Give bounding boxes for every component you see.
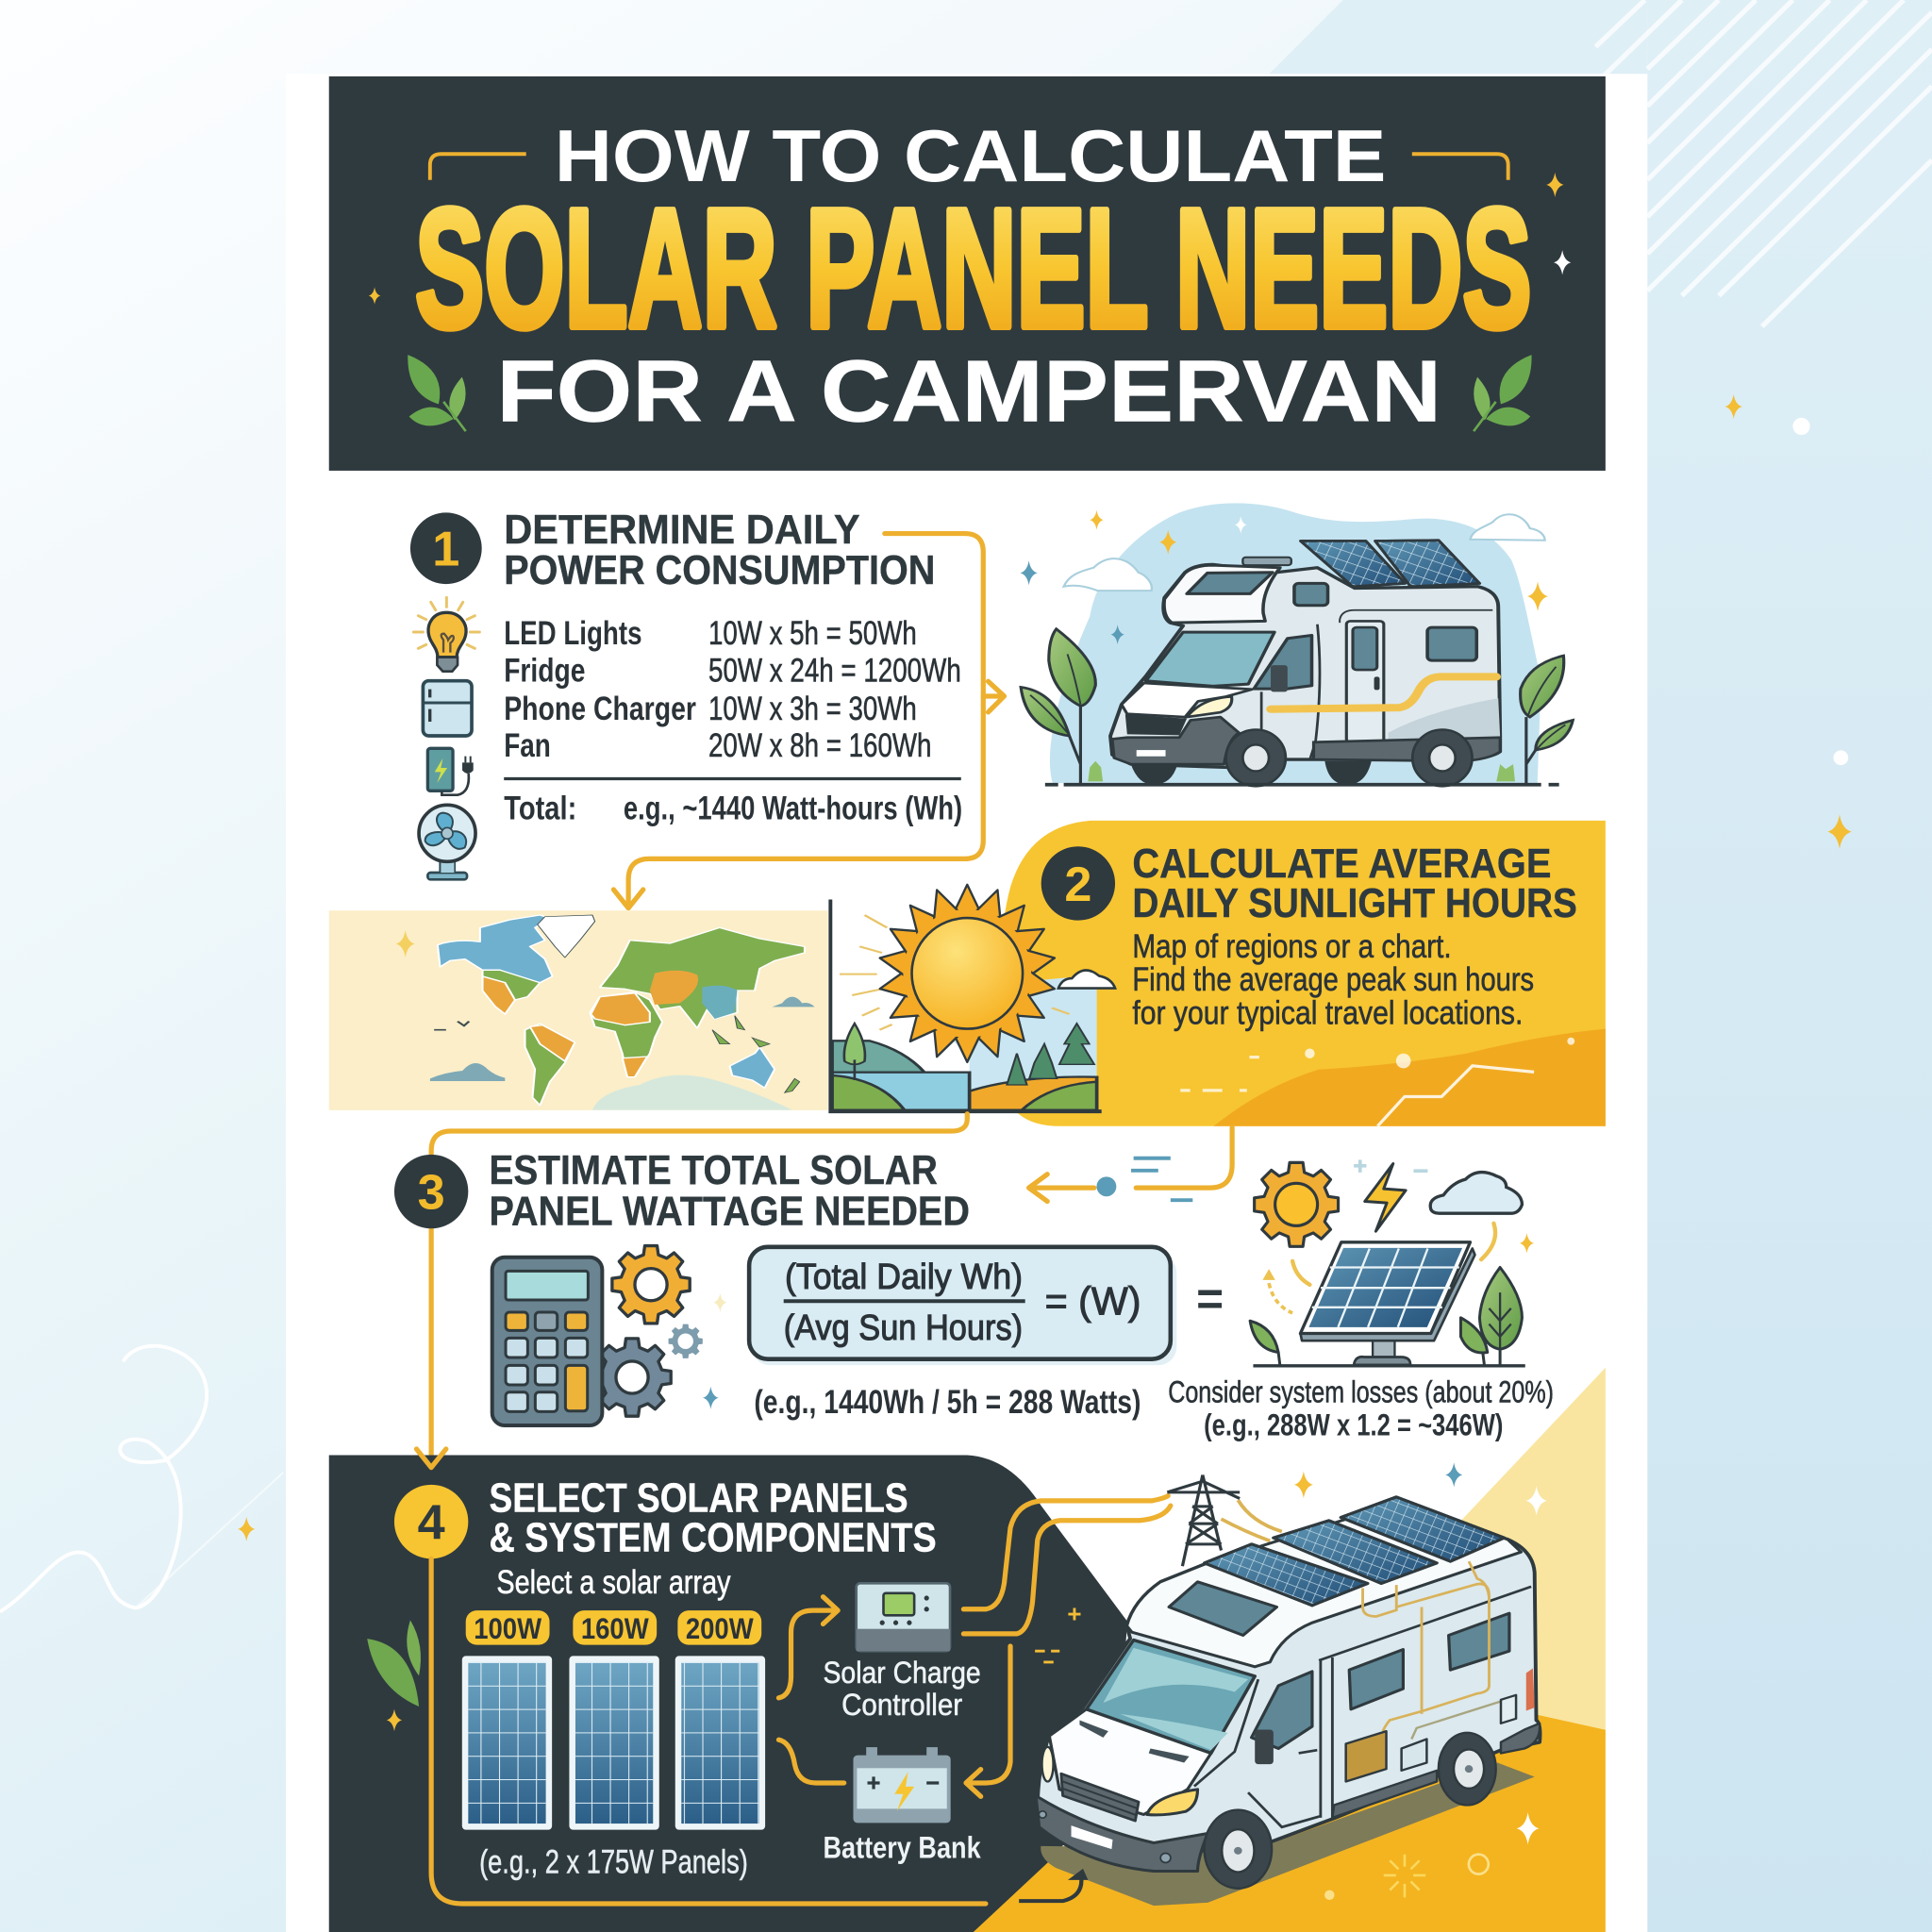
appliance icons [413, 597, 479, 879]
lower side trim [1332, 1724, 1540, 1818]
clouds [1064, 514, 1545, 591]
left leaf and sparkles [367, 1621, 421, 1731]
teal sparkle [703, 1387, 719, 1409]
icon: sun gear [1255, 1162, 1339, 1246]
step 3 heading: PANEL WATTAGE NEEDED [490, 1189, 970, 1234]
step 4 heading: & SYSTEM COMPONENTS [490, 1515, 937, 1560]
step 4 heading: SELECT SOLAR PANELS [490, 1476, 908, 1522]
array label: Select a solar array [496, 1564, 731, 1601]
overcab [1164, 565, 1280, 623]
windscreen [1087, 1640, 1255, 1753]
step 3 badge [394, 1155, 468, 1228]
hood [1122, 683, 1252, 717]
step 3 heading: ESTIMATE TOTAL SOLAR [490, 1148, 938, 1193]
dark panel [329, 1456, 1127, 1932]
plants [1250, 1268, 1522, 1365]
step 2 badge: 2 [1064, 858, 1091, 912]
section 3: estimate wattage [394, 1114, 1606, 1738]
section 4: select panels and components [329, 1449, 1606, 1932]
arrow head [1262, 1269, 1275, 1280]
roof solar panels [1301, 541, 1479, 587]
cloud near sun [1058, 971, 1115, 989]
system losses note: Consider system losses (about 20%) [1168, 1374, 1554, 1408]
pylon wires [1221, 1500, 1282, 1541]
consumption table: e.g., ~1440 Watt-hours (Wh) [624, 791, 962, 827]
door window [1252, 1672, 1312, 1748]
wipers [1079, 1720, 1190, 1762]
arrow: from yellow panel to left [1029, 1127, 1232, 1201]
icon: fridge [423, 681, 472, 736]
arrow: step 1 to camper and step 2 [613, 534, 1004, 908]
wattage badges [466, 1610, 761, 1645]
wiring [1363, 1561, 1489, 1731]
ground line [1045, 779, 1559, 790]
bumper [1112, 717, 1239, 764]
consumption table: 50W x 24h = 1200Wh [708, 652, 961, 689]
icon: light bulb [413, 597, 479, 672]
windows [1187, 573, 1476, 660]
small arrows [1292, 1224, 1495, 1285]
wheel shadows [1131, 761, 1372, 785]
map panel [329, 910, 828, 1110]
mirror [1271, 665, 1288, 691]
illustration: motorhome with roof panels [1021, 503, 1573, 786]
van body [1038, 1503, 1541, 1865]
yellow stripe [1271, 676, 1496, 709]
step 4 heading [490, 1476, 937, 1560]
pale sparkle [713, 1293, 726, 1312]
consumption table: 10W x 5h = 50Wh [708, 615, 917, 652]
grey wire [1411, 1701, 1501, 1739]
step 4 badge [394, 1485, 468, 1558]
orange hills [1214, 1029, 1606, 1126]
consumption table: Fan [504, 727, 551, 764]
equals sign: = [1196, 1273, 1224, 1325]
step 1 badge [410, 512, 482, 584]
windscreen [1146, 632, 1274, 686]
sparkles [1294, 1462, 1547, 1900]
camper sparkles [1020, 510, 1548, 644]
roof [1126, 1503, 1521, 1667]
consumption table: Total: [504, 791, 576, 827]
chart frame [830, 899, 1102, 1111]
title brackets [430, 154, 1508, 180]
arrow: step 2 to step 3 [431, 1114, 967, 1464]
icon: cloud [1430, 1173, 1522, 1213]
paper sheet [286, 74, 1647, 1932]
box trim line [1340, 610, 1492, 623]
skirt [1314, 738, 1500, 761]
solar energy illustration [1250, 1160, 1534, 1366]
controller label: Controller [841, 1687, 962, 1722]
ground line [1253, 1361, 1525, 1371]
headlight [1147, 1790, 1197, 1815]
dashed arrow [1269, 1283, 1292, 1313]
formula box: (Total Daily Wh) [785, 1257, 1023, 1297]
heading line 1: HOW TO CALCULATE [555, 114, 1386, 197]
world map [430, 915, 815, 1110]
licence plate [1072, 1825, 1112, 1849]
controller label: Solar Charge [823, 1655, 981, 1690]
door lines [1194, 1657, 1332, 1827]
marks on dark panel [1035, 1607, 1080, 1662]
controller label [823, 1655, 981, 1722]
wattage badges: 200W [686, 1612, 754, 1645]
step 2 body text [1132, 928, 1534, 1031]
landscape chart [832, 915, 1097, 1110]
roof vent [1242, 558, 1291, 565]
cab door window [1254, 635, 1312, 689]
light yellow corner [1448, 1368, 1606, 1738]
van shadow [1041, 1762, 1535, 1906]
title banner [329, 76, 1606, 471]
battery label: Battery Bank [823, 1830, 981, 1865]
consumption table: LED Lights [504, 615, 641, 652]
formula box: = (W) [1045, 1279, 1141, 1324]
icon: calculator [492, 1257, 602, 1425]
step 3 heading [490, 1148, 970, 1234]
bumper [1036, 1795, 1208, 1871]
lower side panel [1389, 698, 1500, 742]
tail light [1526, 1668, 1535, 1710]
step 2 badge [1041, 846, 1115, 921]
icon: grey gear [593, 1339, 671, 1416]
grille [1125, 714, 1187, 735]
connection arrows [431, 1496, 1171, 1904]
grille [1061, 1774, 1139, 1821]
step 2 body text: for your typical travel locations. [1132, 994, 1523, 1031]
door [1346, 621, 1384, 742]
arrow to van [1019, 1869, 1088, 1901]
wheels [1226, 729, 1473, 786]
wattage badges: 100W [474, 1612, 541, 1645]
icon: gold gear [612, 1246, 690, 1324]
headlight [1187, 696, 1232, 717]
consumption table: Phone Charger [504, 691, 696, 727]
step 4 badge: 4 [418, 1495, 445, 1550]
step 3 badge: 3 [418, 1165, 445, 1220]
sky blob [1050, 503, 1541, 783]
consumption table [504, 615, 962, 827]
battery in van [1346, 1695, 1516, 1781]
plants [1021, 629, 1573, 783]
mirror [1255, 1729, 1274, 1764]
step 2 heading: CALCULATE AVERAGE [1132, 841, 1551, 887]
step 2 heading [1132, 841, 1577, 926]
icon: fan [419, 805, 475, 879]
side body line [1319, 1587, 1531, 1660]
roof solar panels [1205, 1497, 1505, 1606]
cab door line [1261, 625, 1320, 759]
consumption table: 20W x 8h = 160Wh [708, 727, 931, 764]
heading line 3: FOR A CAMPERVAN [496, 342, 1441, 441]
windscreen shading [1103, 1648, 1248, 1750]
licence plate [1137, 750, 1166, 757]
calculator and gears [492, 1246, 726, 1425]
consumption table: 10W x 3h = 30Wh [708, 691, 917, 727]
yellow panel [1001, 821, 1606, 1126]
icon: battery [855, 1747, 949, 1821]
left leaves [408, 355, 466, 431]
icon: small gear [669, 1324, 703, 1358]
side windows [1349, 1613, 1509, 1709]
system losses note [1168, 1374, 1554, 1442]
step 2 body text: Find the average peak sun hours [1132, 961, 1534, 998]
icon: sun [877, 885, 1057, 1062]
consumption table: Fridge [504, 652, 585, 689]
gold floor [974, 1700, 1606, 1932]
step 2 heading: DAILY SUNLIGHT HOURS [1132, 881, 1577, 926]
side light [1041, 1747, 1054, 1781]
title sparkles [369, 173, 1571, 305]
icon: phone charger [427, 748, 474, 795]
map sparkle [396, 930, 415, 958]
icon: pylon [1167, 1474, 1240, 1566]
skylight [1169, 1582, 1276, 1635]
arrow head into panel [416, 1449, 446, 1468]
fog lights [1039, 1811, 1171, 1862]
step 2 body text: Map of regions or a chart. [1132, 928, 1452, 965]
section 1: daily power consumption [410, 508, 1004, 908]
panels caption: (e.g., 2 x 175W Panels) [479, 1843, 748, 1880]
illustration: campervan [1019, 1474, 1541, 1906]
icon: solar panel [1300, 1242, 1474, 1365]
section 2: sunlight hours [329, 821, 1606, 1126]
step 1 heading: POWER CONSUMPTION [504, 548, 935, 593]
formula box [749, 1247, 1176, 1365]
formula example: (e.g., 1440Wh / 5h = 288 Watts) [754, 1384, 1141, 1421]
step 1 badge: 1 [432, 523, 459, 577]
camper body [1110, 564, 1500, 767]
formula box: (Avg Sun Hours) [784, 1308, 1023, 1348]
gold sparkle [1520, 1233, 1534, 1254]
trail line [1377, 1066, 1534, 1126]
hills decorations [1180, 1038, 1574, 1091]
hood [1049, 1709, 1211, 1814]
step 1 heading: DETERMINE DAILY [504, 508, 860, 553]
system losses note: (e.g., 288W x 1.2 = ~346W) [1204, 1407, 1503, 1442]
step 1 heading [504, 508, 935, 593]
right leaves [1474, 355, 1532, 431]
wheels [1205, 1733, 1496, 1889]
pale symbols [1354, 1160, 1427, 1173]
icon: lightning bolt [1365, 1164, 1406, 1231]
icon: charge controller [857, 1583, 950, 1651]
wattage badges: 160W [581, 1612, 649, 1645]
solar panels [462, 1656, 765, 1830]
